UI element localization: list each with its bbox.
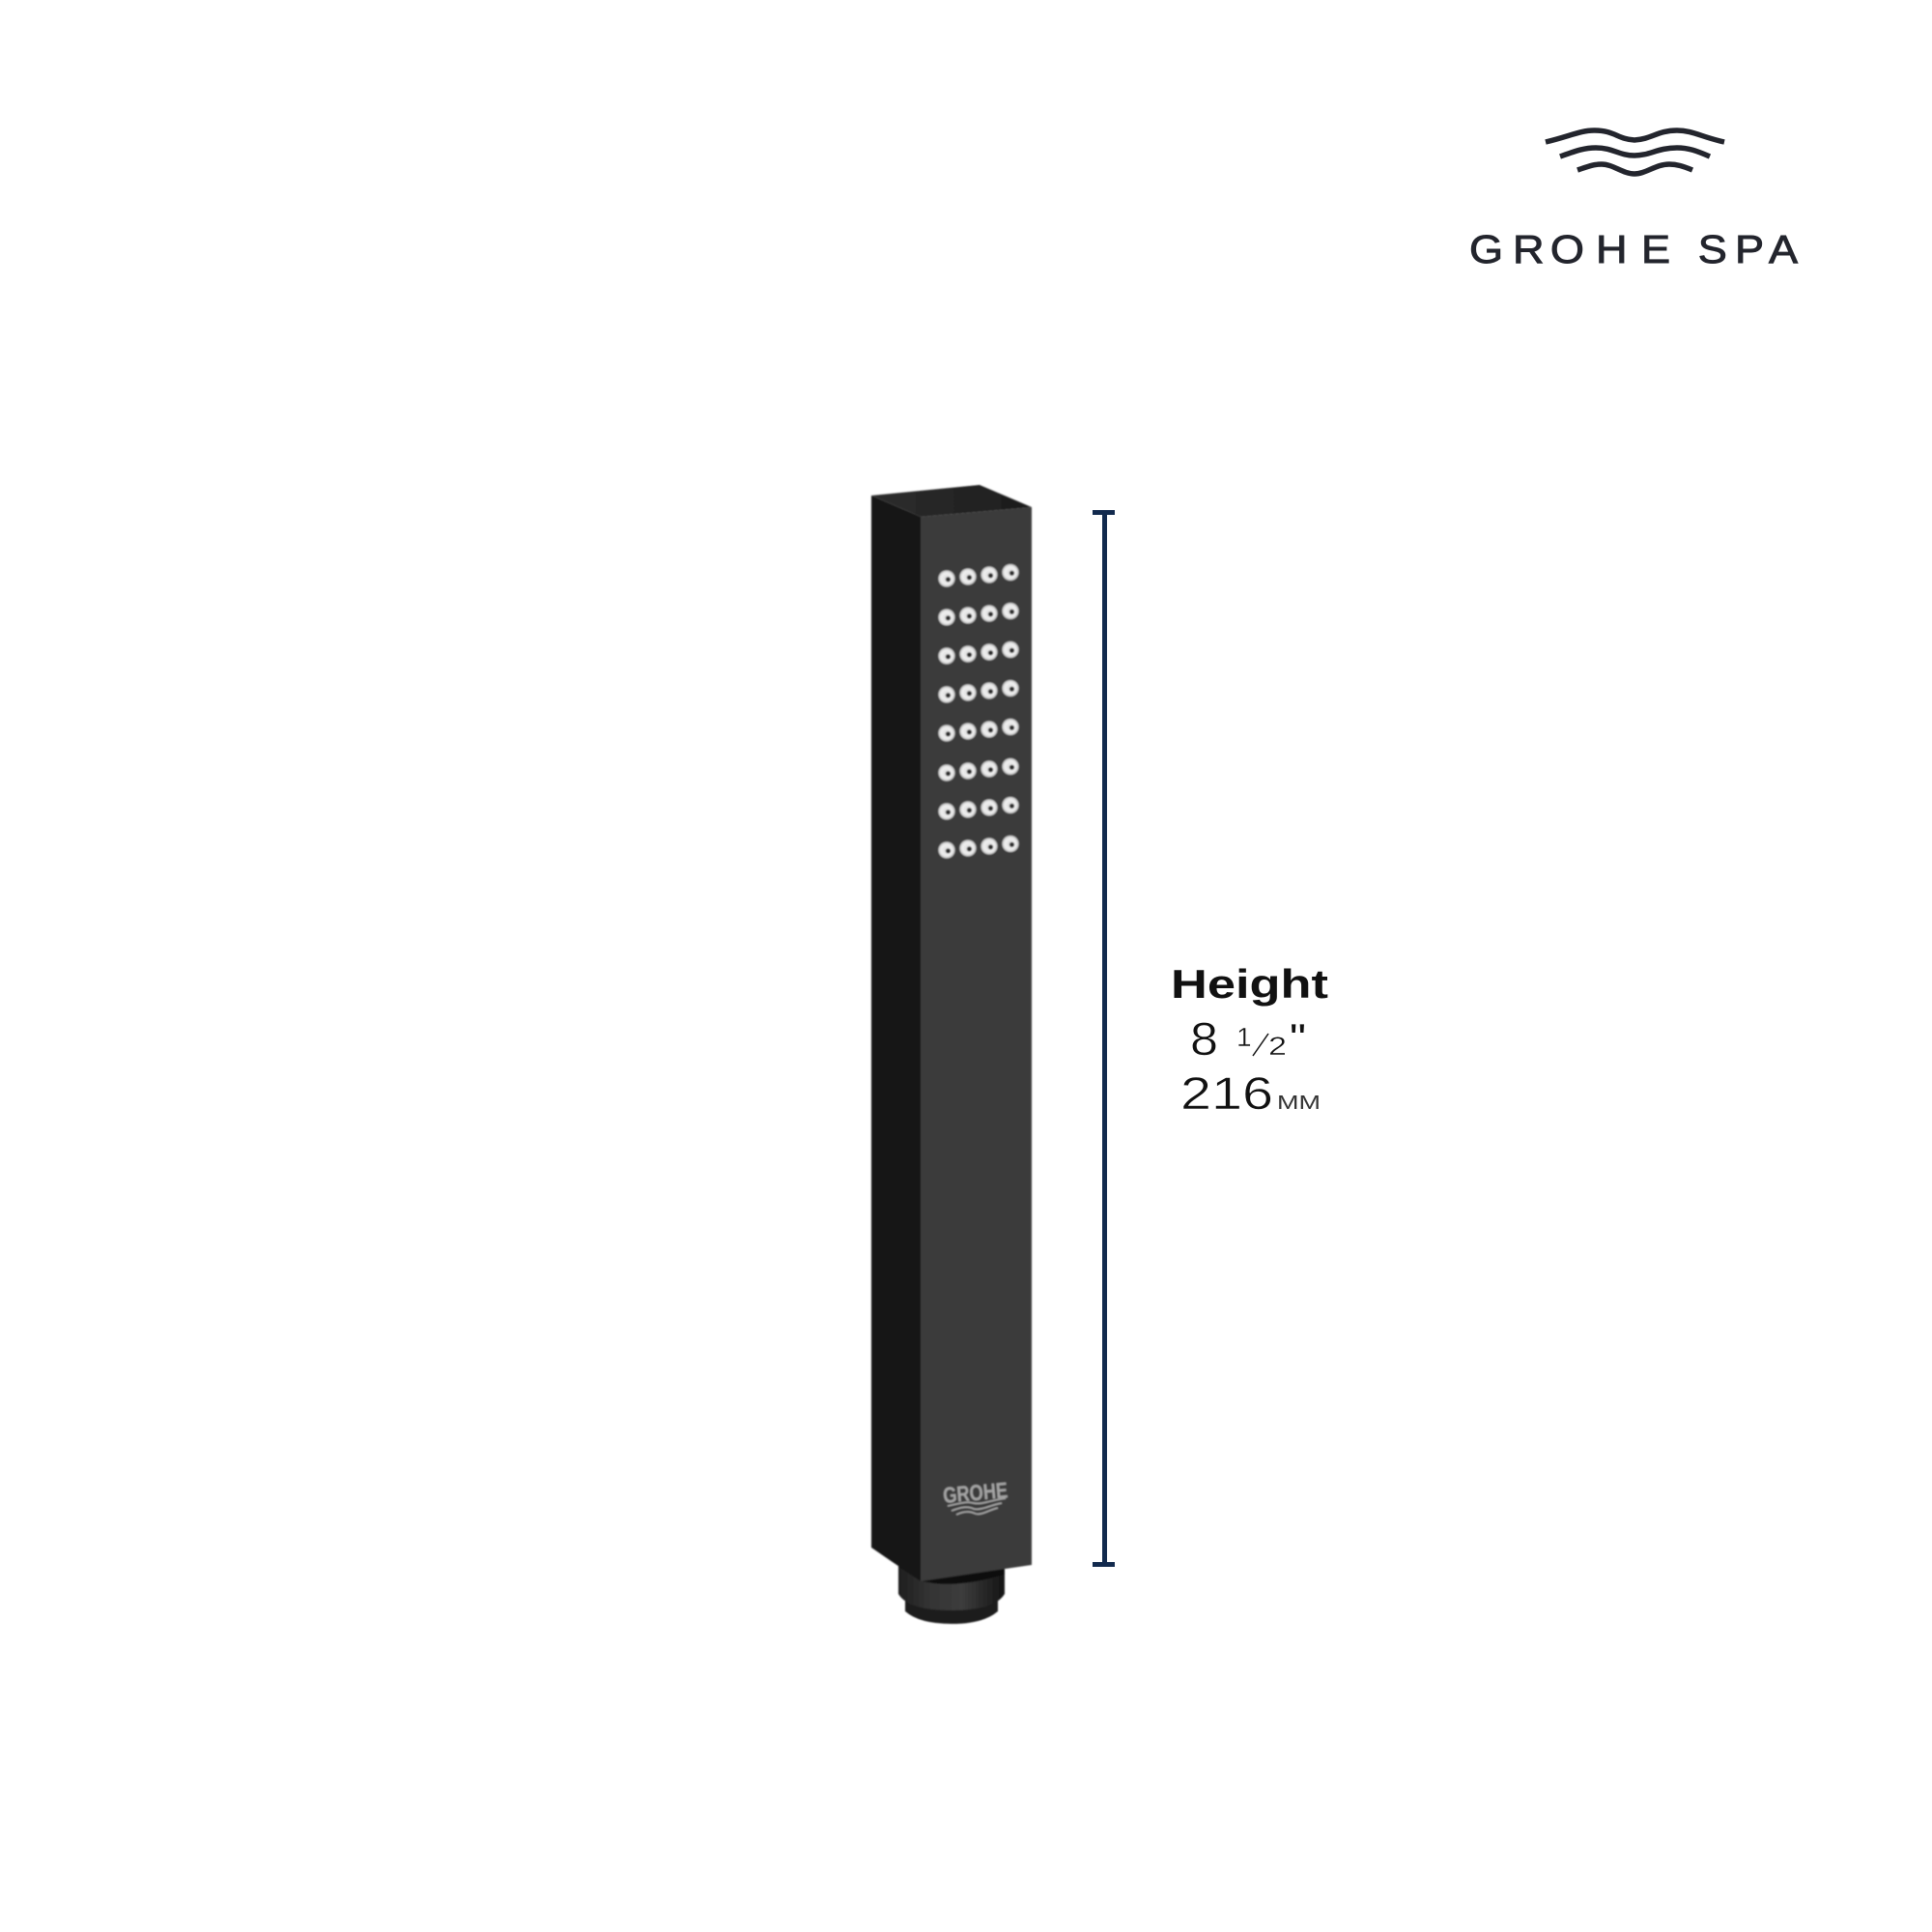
heading: Height: Height <box>1171 961 1328 1007</box>
inches value: 2 <box>1268 1032 1287 1061</box>
inches value: " <box>1290 1017 1306 1060</box>
millimetres value: MM <box>1277 1093 1321 1114</box>
body top face <box>871 485 1032 517</box>
millimetres value: 216 <box>1180 1067 1273 1119</box>
product: hand shower <box>871 485 1032 1624</box>
inches value <box>1190 1014 1306 1065</box>
height label <box>1171 961 1328 1119</box>
wordmark: GROHE SPA <box>1469 228 1798 272</box>
inches value: 1 <box>1236 1022 1252 1052</box>
inches value: 8 <box>1190 1014 1218 1065</box>
dimension line <box>1093 510 1115 1567</box>
icon: waves <box>1546 130 1724 174</box>
millimetres value <box>1180 1067 1321 1119</box>
brand mark on body <box>942 1477 1009 1515</box>
brand mark on body: GROHE <box>942 1477 1009 1508</box>
nozzles <box>938 564 1019 859</box>
body side face <box>871 496 921 1581</box>
body front face <box>921 507 1032 1581</box>
connector <box>898 1557 1005 1624</box>
logo: GROHE SPA <box>1469 130 1798 272</box>
